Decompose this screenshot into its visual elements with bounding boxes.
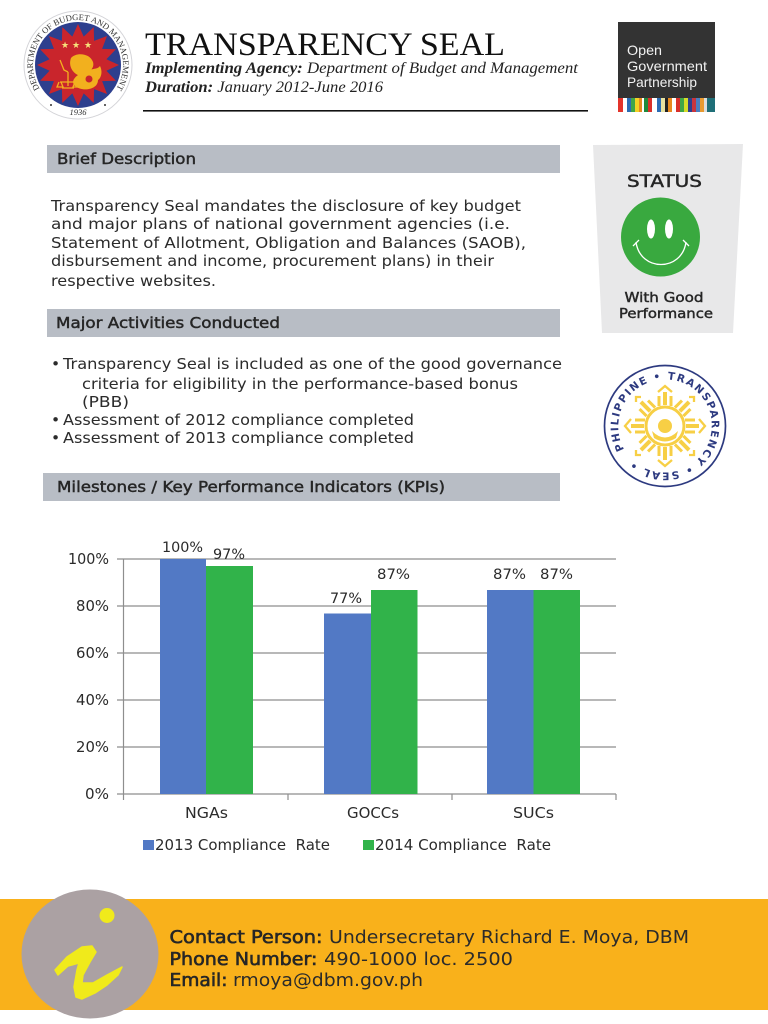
- contact details: 490-1000 loc. 2500: [324, 950, 513, 970]
- data labels: 87%: [493, 567, 526, 583]
- y axis labels: 20%: [76, 738, 109, 756]
- text block: activities list: Assessment of 2013 compliance completed: [63, 429, 414, 447]
- data labels: 77%: [330, 591, 362, 607]
- icon: Philippine Transparency Seal: PHILIPPINE • TRANSPARENCY • SEAL •: [610, 372, 720, 480]
- logo: Open Government Partnership: Government: [627, 58, 707, 74]
- text block: description: [50, 197, 526, 290]
- logo: Open Government Partnership: Open: [627, 42, 662, 58]
- y axis labels: 40%: [76, 691, 109, 709]
- status label: With Good: [624, 290, 704, 306]
- text block: activities list: (PBB): [82, 393, 129, 411]
- panel: contact footer: [0, 890, 768, 1018]
- legend: [143, 836, 551, 854]
- x axis labels: NGAs: [185, 804, 228, 822]
- heading: milestones: [43, 473, 560, 501]
- logo: Open Government Partnership: [618, 22, 715, 112]
- text block: description: Transparency Seal mandates the disclosure of key budget: [50, 197, 521, 215]
- logo: Department of Budget and Management: ★: [61, 41, 69, 51]
- text block: description: and major plans of national government agencies (i.e.: [51, 215, 510, 233]
- text block: activities list: [51, 355, 562, 447]
- status label: Performance: [619, 306, 713, 322]
- text block: activities list: criteria for eligibility in the performance-based bonus: [82, 375, 518, 393]
- heading: milestones: Milestones / Key Performance Indicators (KPIs): [57, 478, 445, 496]
- data labels: 97%: [213, 547, 245, 563]
- bars: SUCs: [487, 590, 580, 794]
- title: TRANSPARENCY SEAL: [145, 27, 505, 63]
- legend: 2013 Compliance Rate: [155, 836, 330, 854]
- logo: Department of Budget and Management: 1936: [70, 107, 87, 117]
- logo: Department of Budget and Management: ★: [84, 41, 92, 51]
- y axis labels: [68, 550, 109, 803]
- duration line: Duration: January 2012-June 2016: [144, 79, 383, 96]
- text block: description: Statement of Allotment, Obligation and Balances (SAOB),: [51, 234, 526, 252]
- legend: 2014 Compliance Rate: [375, 836, 551, 854]
- text block: description: respective websites.: [51, 272, 216, 290]
- logo: Department of Budget and Management: DEPARTMENT OF BUDGET AND MANAGEMENT: [27, 14, 129, 92]
- contact details: Phone Number:: [170, 950, 318, 970]
- x axis labels: GOCCs: [347, 804, 399, 822]
- logo: Department of Budget and Management: ★: [72, 41, 80, 51]
- icon: information symbol: [22, 890, 158, 1018]
- data labels: [162, 540, 573, 607]
- y axis labels: 0%: [85, 785, 109, 803]
- contact details: Email:: [170, 971, 228, 991]
- y axis labels: 100%: [68, 550, 109, 568]
- contact details: Contact Person:: [170, 928, 322, 948]
- text block: activities list: •: [51, 411, 60, 429]
- contact details: rmoya@dbm.gov.ph: [233, 971, 423, 991]
- panel: status: [593, 144, 743, 333]
- y axis labels: 60%: [76, 644, 109, 662]
- bars: NGAs: [160, 559, 253, 794]
- data labels: 87%: [540, 567, 573, 583]
- text block: activities list: Transparency Seal is included as one of the good governance: [62, 355, 562, 373]
- status heading: STATUS: [627, 172, 702, 191]
- x axis labels: [185, 804, 554, 822]
- text block: activities list: •: [51, 429, 60, 447]
- heading: major activities: [47, 309, 560, 337]
- bar chart: compliance rates: [68, 540, 616, 854]
- y axis labels: 80%: [76, 597, 109, 615]
- text block: activities list: Assessment of 2012 compliance completed: [63, 411, 414, 429]
- data labels: 87%: [377, 567, 410, 583]
- text block: description: disbursement and income, procurement plans) in their: [51, 252, 495, 270]
- bars: GOCCs: [324, 590, 418, 794]
- contact details: Undersecretary Richard E. Moya, DBM: [329, 928, 689, 948]
- contact details: [170, 928, 689, 991]
- heading: brief description: [47, 145, 560, 173]
- text block: activities list: •: [51, 355, 60, 373]
- icon: green smiley: [621, 198, 700, 276]
- x axis labels: SUCs: [513, 804, 554, 822]
- implementing agency line: Implementing Agency: Department of Budget and Management: [144, 60, 579, 77]
- heading: major activities: Major Activities Conducted: [56, 314, 280, 332]
- data labels: 100%: [162, 540, 203, 556]
- status label: [619, 290, 713, 322]
- heading: brief description: Brief Description: [57, 150, 196, 168]
- logo: Open Government Partnership: Partnership: [627, 74, 697, 90]
